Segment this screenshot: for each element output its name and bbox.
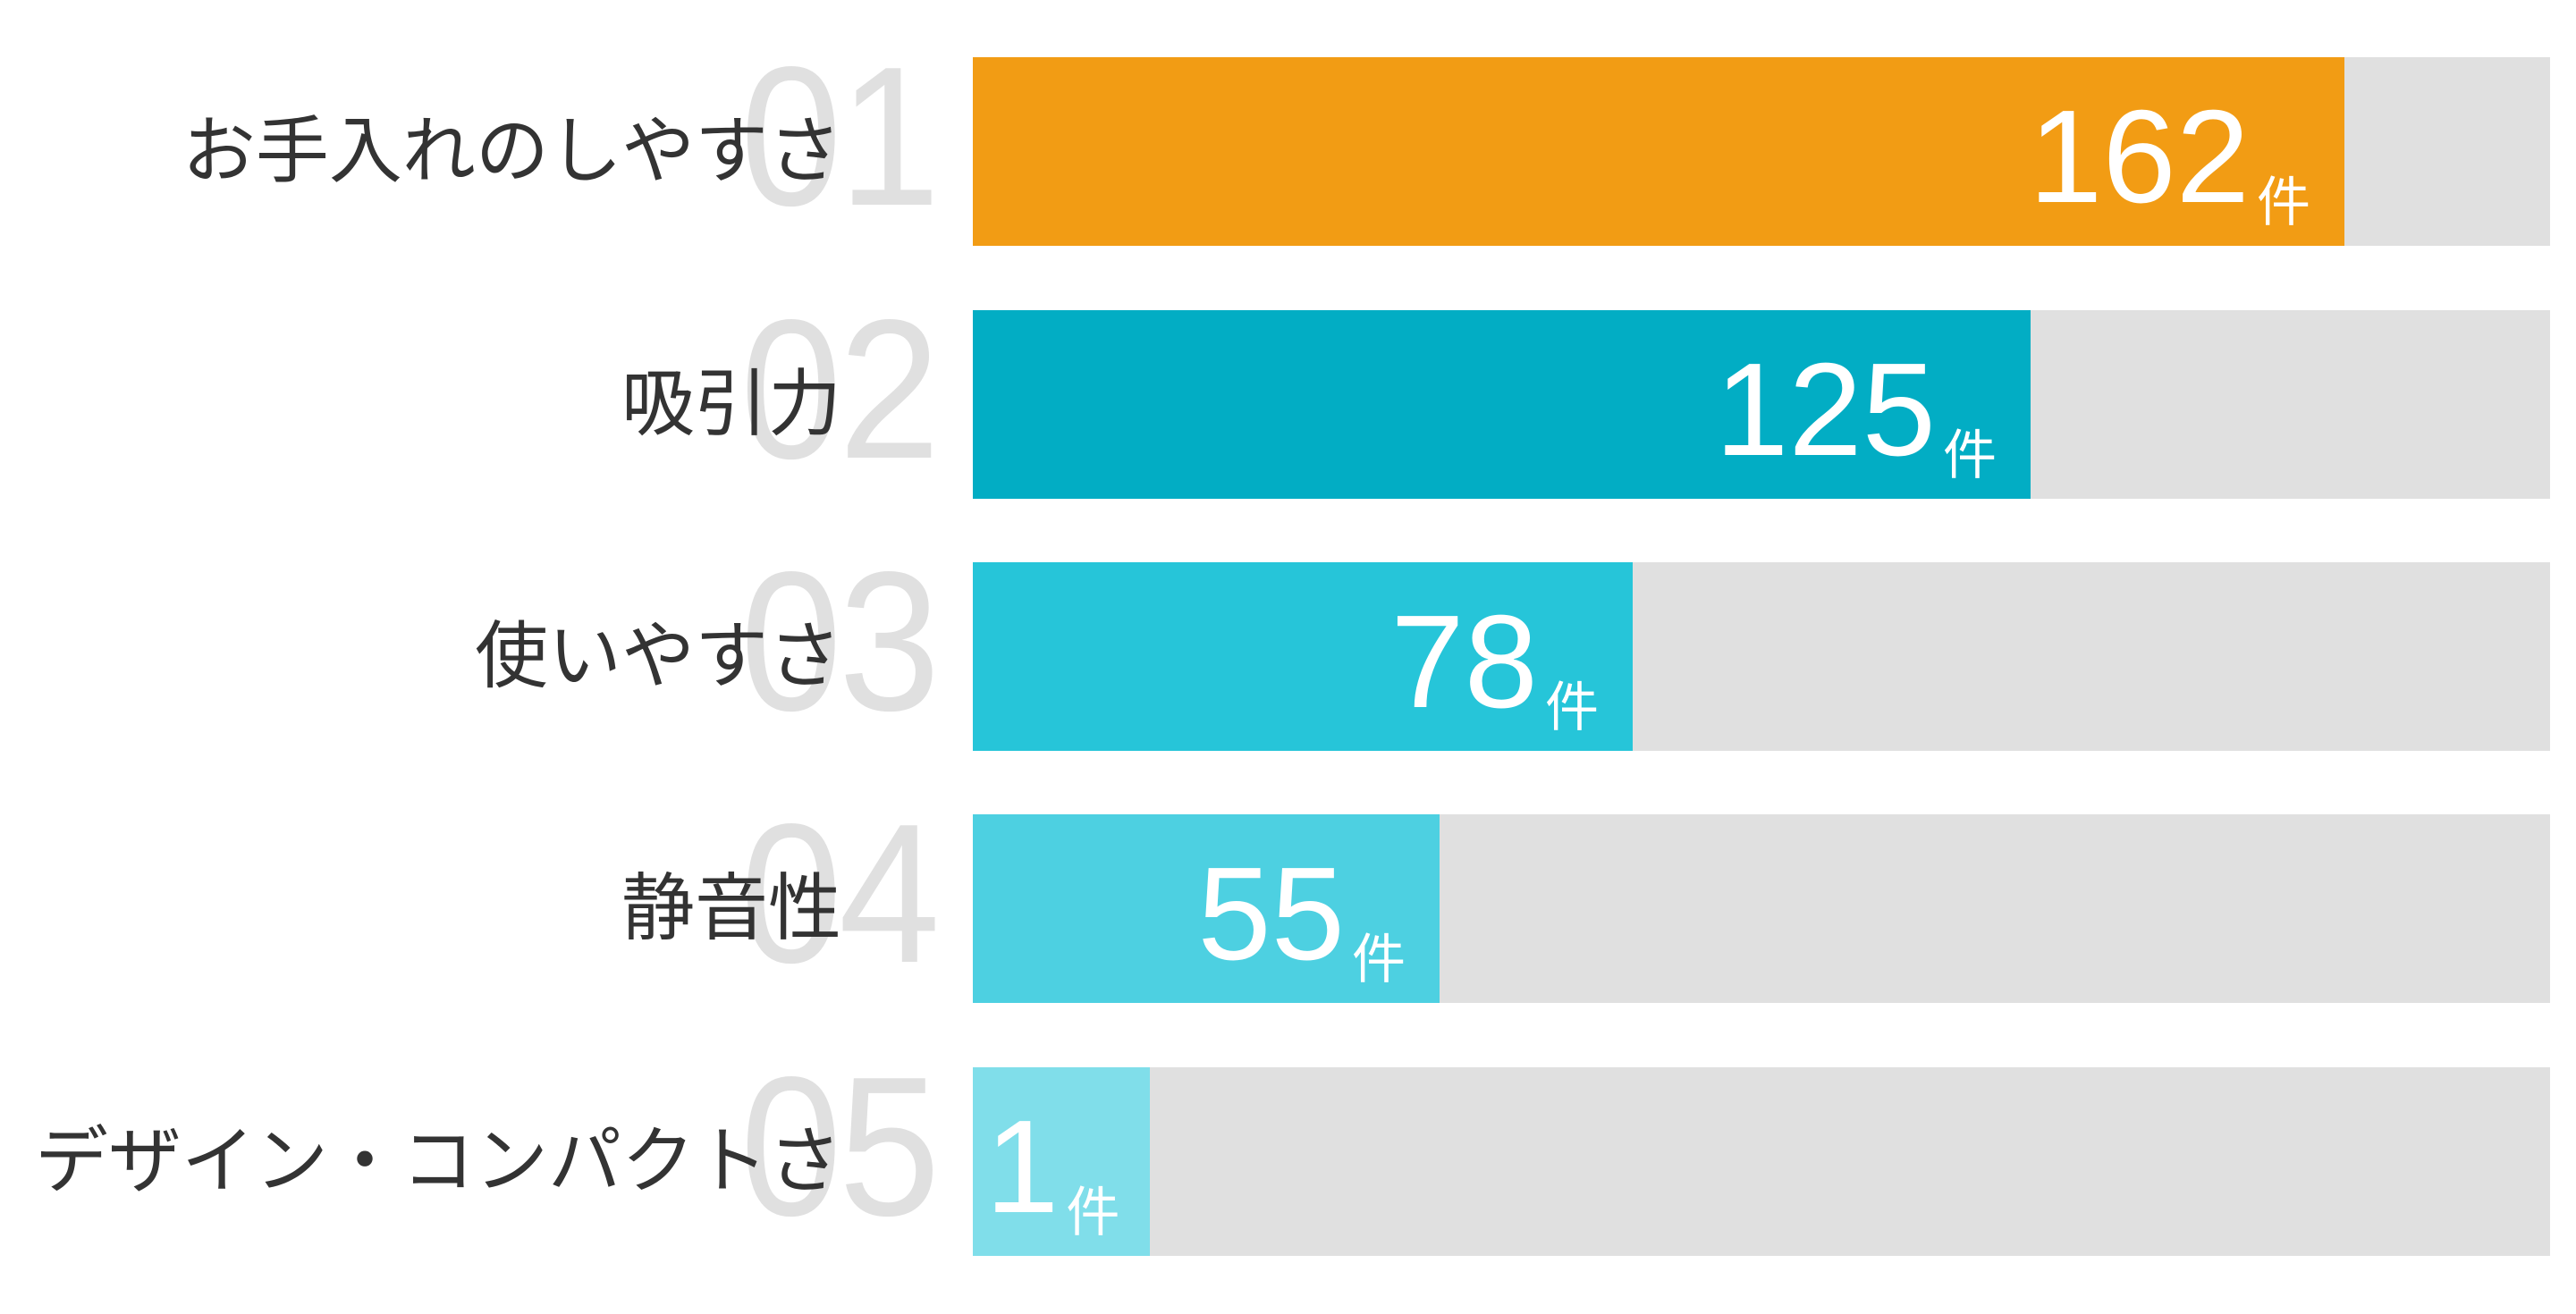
rank number 02: 02	[740, 279, 937, 501]
bar: 78	[973, 562, 2550, 751]
row 3	[475, 531, 2550, 753]
bar: 1: 件	[1066, 1183, 1119, 1242]
bar: 1: 1	[985, 1093, 1059, 1241]
rank number 05: 05	[740, 1036, 937, 1258]
rank number 04: 04	[740, 783, 937, 1005]
bar: 125	[973, 310, 2550, 499]
label: お手入れのしやすさ	[182, 111, 841, 192]
bar: 55: 55	[1197, 840, 1345, 988]
bar: 55: 件	[1352, 930, 1406, 990]
rank number 03: 03	[740, 531, 937, 753]
bar: 162: 件	[2257, 173, 2310, 232]
row 1	[182, 26, 2550, 248]
row 5	[35, 1036, 2550, 1258]
label: デザイン・コンパクトさ	[35, 1121, 841, 1202]
bar: 162: 162	[2029, 83, 2250, 231]
label: 静音性	[621, 868, 841, 949]
bar: 125: 125	[1715, 336, 1936, 484]
label: 吸引力	[621, 364, 841, 445]
bar: 1	[973, 1067, 2550, 1256]
label: 使いやすさ	[475, 616, 841, 697]
row 2	[621, 279, 2550, 501]
bar: 162	[973, 57, 2550, 246]
bar: 78: 件	[1545, 678, 1599, 737]
rank number 01: 01	[740, 26, 937, 248]
row 4	[621, 783, 2550, 1005]
bar: 55	[973, 814, 2550, 1003]
bar: 78: 78	[1390, 588, 1538, 736]
bar: 125: 件	[1943, 425, 1997, 485]
